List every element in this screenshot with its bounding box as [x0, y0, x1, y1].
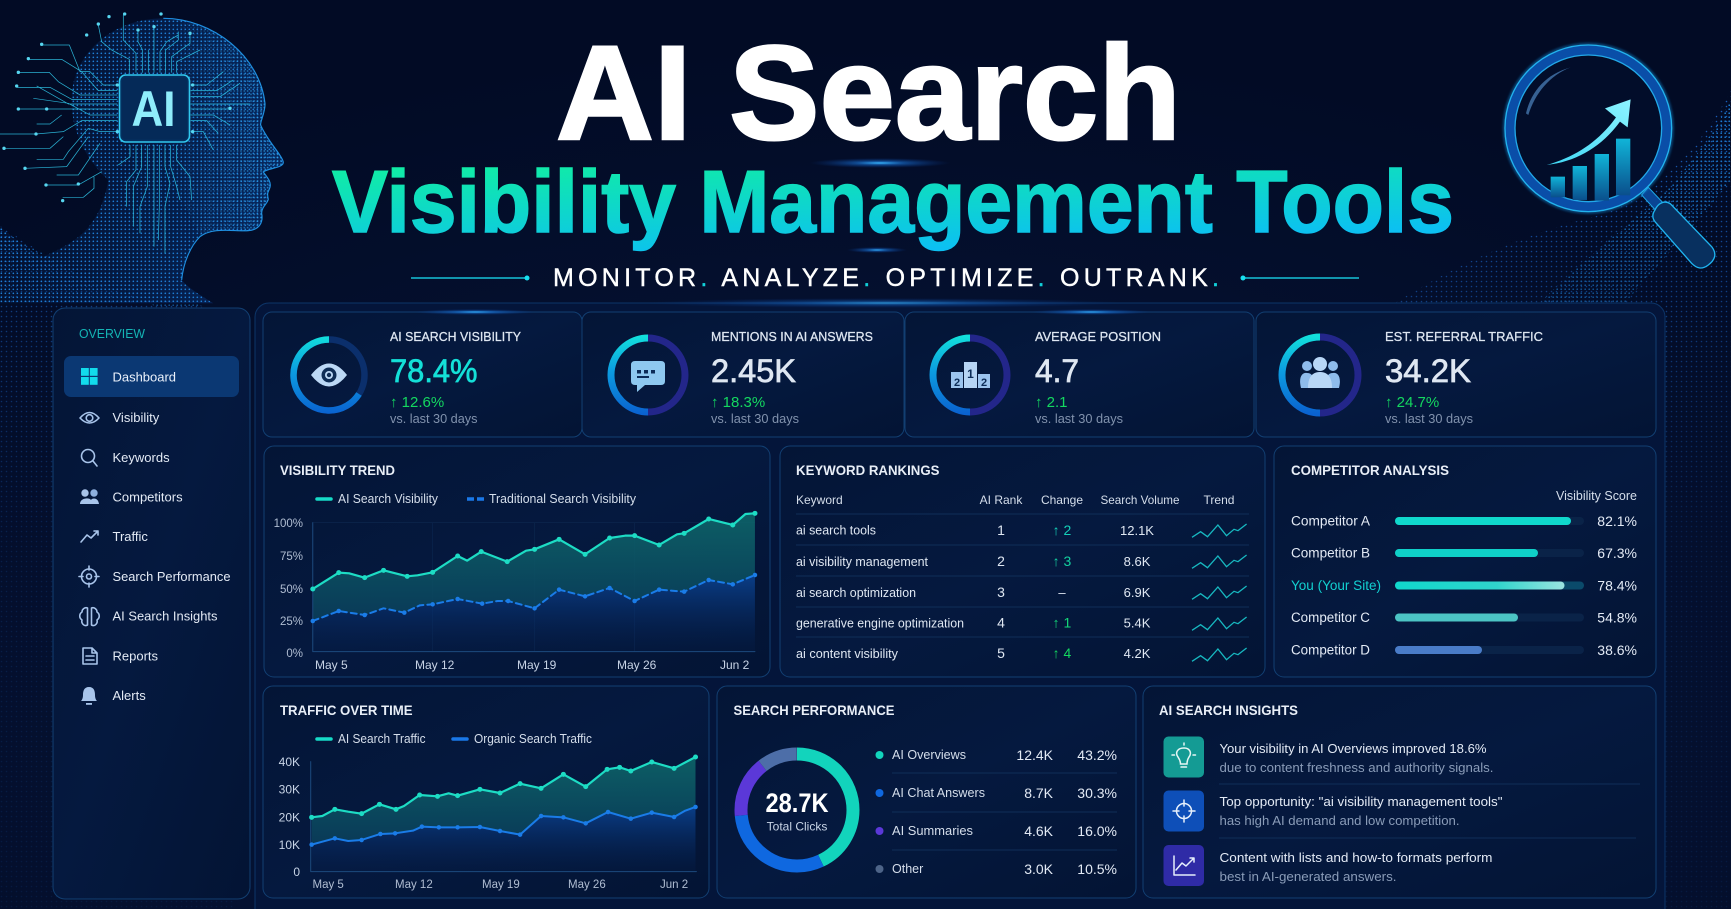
item: Competitors: [80, 489, 183, 504]
y axis labels: 25%: [280, 616, 303, 628]
KPI text: 34.2K: [1385, 353, 1471, 389]
bar: Competitor D: Competitor D: [1291, 642, 1370, 658]
row 5: ↑ 4: [1053, 645, 1072, 661]
legend: Traditional Search Visibility: [489, 492, 637, 506]
column label: Visibility Score: [1556, 489, 1637, 503]
KPI text: vs. last 30 days: [1385, 412, 1473, 426]
active item: Dashboard: [64, 356, 239, 397]
chip: [120, 75, 190, 142]
y axis labels: 100%: [274, 518, 303, 530]
item: Visibility: Visibility: [112, 410, 160, 425]
item: Visibility: [80, 410, 160, 425]
y axis labels: 40K: [279, 755, 300, 769]
insight 2: has high AI demand and low competition.: [1220, 813, 1460, 828]
row 5: 4.2K: [1124, 646, 1151, 661]
KPI text: ↑ 24.7%: [1385, 394, 1439, 411]
bar chart in lens: [1551, 139, 1630, 201]
row 1: ai search tools: [796, 522, 876, 538]
KPI text: [711, 329, 873, 426]
donut chart: [741, 754, 853, 866]
x axis labels: May 26: [568, 879, 606, 891]
KPI card: Mentions in AI Answers: [582, 312, 904, 437]
x axis labels: May 26: [617, 658, 657, 672]
item: Keywords: [82, 450, 170, 466]
panel: AI search insights: [1143, 686, 1656, 898]
heading: COMPETITOR ANALYSIS: [1291, 462, 1449, 478]
icon: podium: 1: [967, 367, 974, 381]
x axis labels: [312, 879, 688, 891]
donut legend: 10.5%: [1077, 861, 1117, 877]
arrow: [1547, 99, 1631, 165]
item: Search Performance: [79, 566, 230, 587]
head silhouette: [0, 18, 283, 303]
legend: [317, 492, 637, 506]
circuit traces: [0, 14, 250, 253]
table header: Search Volume: [1100, 493, 1180, 507]
bar: Competitor A: Competitor A: [1291, 514, 1370, 528]
row 2: [796, 553, 1247, 569]
icon: podium: 2: [981, 377, 987, 389]
icon: people: [1300, 357, 1340, 388]
insight 1: due to content freshness and authority signals.: [1220, 760, 1494, 775]
tagline: MONITOR. ANALYZE. OPTIMIZE. OUTRANK.: [553, 264, 1219, 292]
item: Alerts: Alerts: [112, 688, 146, 703]
insight 2: [1164, 790, 1503, 832]
donut legend: 12.4K: [1016, 747, 1054, 763]
x axis labels: May 19: [517, 658, 557, 672]
bar: Competitor D: [1291, 642, 1637, 658]
insight 2: Top opportunity: "ai visibility management tools": [1220, 794, 1503, 809]
KPI text: 4.7: [1035, 353, 1079, 389]
ring gauge: [611, 338, 685, 412]
insight 3: best in AI-generated answers.: [1220, 869, 1396, 884]
donut chart: 28.7K: [766, 788, 829, 818]
legend: AI Search Visibility: [338, 492, 439, 506]
dotted wave right: [1395, 90, 1731, 909]
icon: podium: [951, 362, 990, 389]
x axis labels: May 12: [395, 879, 433, 891]
row 1: 12.1K: [1120, 523, 1154, 538]
item: AI Search Insights: [80, 608, 218, 626]
item: Competitors: Competitors: [112, 490, 183, 504]
row 5: [796, 645, 1247, 661]
panel: search performance: [717, 686, 1136, 898]
donut legend: 8.7K: [1024, 785, 1054, 801]
KPI text: EST. REFERRAL TRAFFIC: [1385, 329, 1543, 344]
heading: VISIBILITY TREND: [280, 462, 395, 478]
heading: KEYWORD RANKINGS: [796, 462, 940, 478]
legend: [317, 732, 592, 746]
donut legend: 3.0K: [1024, 861, 1054, 877]
dotted wave left: [0, 226, 235, 909]
KPI text: ↑ 18.3%: [711, 394, 765, 411]
insight 1: Your visibility in AI Overviews improved 18.6%: [1220, 741, 1487, 756]
icon: chat bubble: [631, 361, 665, 392]
heading: SEARCH PERFORMANCE: [734, 702, 894, 718]
item: Keywords: Keywords: [112, 450, 170, 465]
donut legend: AI Summaries: [892, 824, 973, 838]
illustration: magnifier with growth chart: [1505, 45, 1715, 268]
item: AI Search Insights: AI Search Insights: [112, 608, 218, 624]
row 4: generative engine optimization: [796, 616, 964, 630]
bar: Competitor A: 82.1%: [1597, 513, 1637, 529]
magnifier handle: [1642, 187, 1715, 268]
item: Reports: [83, 648, 159, 664]
active item: Dashboard: Dashboard: [112, 370, 176, 384]
KPI text: vs. last 30 days: [711, 412, 799, 426]
donut legend: AI Overviews: [892, 748, 966, 762]
ring gauge: [933, 338, 1007, 412]
x axis labels: Jun 2: [720, 658, 750, 672]
row 5: ai content visibility: [796, 646, 898, 661]
item: Alerts: [81, 687, 146, 705]
insight 1: [1164, 736, 1494, 778]
item: Traffic: [81, 529, 148, 544]
line chart: [311, 757, 696, 872]
item: Reports: Reports: [112, 648, 159, 664]
donut legend: Other: [892, 862, 923, 876]
y axis labels: [274, 518, 303, 660]
ring gauge: [1282, 337, 1358, 413]
KPI text: 2.45K: [711, 353, 796, 389]
donut legend: AI Chat Answers: [892, 786, 985, 800]
row 5: 5: [997, 645, 1005, 661]
row 3: 3: [997, 584, 1005, 600]
bar: Competitor B: Competitor B: [1291, 546, 1370, 560]
KPI text: [1385, 329, 1543, 426]
y axis labels: 20K: [279, 810, 300, 824]
bar: Competitor D: 38.6%: [1597, 642, 1637, 658]
table header: Change: [1041, 493, 1083, 507]
bar: You (Your Site): [1291, 578, 1637, 594]
item: Search Performance: Search Performance: [112, 569, 230, 584]
x axis labels: May 5: [315, 658, 348, 672]
row 3: [796, 584, 1247, 600]
row 2: ↑ 3: [1053, 553, 1072, 569]
bar: Competitor A: [1291, 513, 1637, 529]
x axis labels: May 12: [415, 658, 455, 672]
dashboard container: [255, 298, 1665, 909]
panel: sidebar: [53, 308, 250, 899]
table header: AI Rank: [980, 493, 1023, 507]
x axis labels: May 5: [312, 879, 344, 891]
row 1: ↑ 2: [1053, 522, 1072, 538]
heading: AI SEARCH INSIGHTS: [1159, 702, 1298, 718]
row 2: ai visibility management: [796, 554, 928, 569]
row 3: ai search optimization: [796, 585, 916, 600]
sidebar heading: OVERVIEW: [79, 326, 146, 341]
glow accent under title: [810, 158, 950, 168]
icon: eye: [311, 364, 347, 386]
panel: competitor analysis: [1274, 446, 1656, 677]
table header: Trend: [1204, 493, 1234, 507]
icon: podium: 2: [954, 377, 960, 389]
row 4: [796, 614, 1247, 630]
row 1: [796, 522, 1247, 538]
illustration: AI head with circuit chip: [0, 14, 283, 303]
line chart: [313, 513, 755, 652]
KPI text: [390, 329, 521, 426]
chip: AI: [132, 81, 176, 137]
row 1: 1: [997, 522, 1005, 538]
KPI text: vs. last 30 days: [390, 412, 478, 426]
bar: Competitor B: 67.3%: [1597, 545, 1637, 561]
insight 3: [1164, 845, 1492, 886]
KPI text: AVERAGE POSITION: [1035, 329, 1161, 344]
row 4: 4: [997, 614, 1005, 630]
title: AI Search: AI Search: [556, 19, 1181, 168]
y axis labels: 30K: [279, 782, 300, 796]
bar: Competitor C: [1291, 610, 1637, 626]
row 2: 2: [997, 553, 1005, 569]
y axis labels: 75%: [280, 551, 303, 563]
y axis labels: 10K: [279, 838, 300, 852]
bar: You (Your Site): 78.4%: [1597, 578, 1637, 594]
donut legend: [876, 747, 1117, 877]
x axis labels: May 19: [482, 879, 520, 891]
bar: You (Your Site): You (Your Site): [1291, 578, 1381, 593]
KPI card: Est. Referral Traffic: [1256, 312, 1656, 437]
panel: visibility trend: [264, 446, 770, 677]
bar: Competitor C: Competitor C: [1291, 610, 1370, 625]
heading: TRAFFIC OVER TIME: [280, 702, 413, 718]
row 2: 8.6K: [1124, 554, 1151, 569]
legend: AI Search Traffic: [338, 732, 426, 746]
KPI text: MENTIONS IN AI ANSWERS: [711, 329, 873, 344]
panel: traffic over time: [263, 686, 709, 898]
donut legend: 4.6K: [1024, 823, 1054, 839]
KPI text: [1035, 329, 1161, 426]
y axis labels: 50%: [280, 584, 303, 596]
bar: Competitor C: 54.8%: [1597, 610, 1637, 626]
donut legend: 16.0%: [1077, 823, 1117, 839]
title: Visibility Management Tools: Visibility Management Tools: [332, 152, 1454, 251]
donut chart: Total Clicks: [767, 820, 827, 834]
KPI text: AI SEARCH VISIBILITY: [390, 329, 521, 344]
y axis labels: [279, 755, 300, 879]
row 3: –: [1058, 585, 1066, 600]
y axis labels: 0: [293, 865, 300, 879]
y axis labels: 0%: [286, 648, 303, 660]
KPI text: vs. last 30 days: [1035, 412, 1123, 426]
row 3: 6.9K: [1124, 585, 1151, 600]
KPI text: ↑ 12.6%: [390, 394, 444, 411]
KPI text: ↑ 2.1: [1035, 394, 1068, 411]
KPI text: 78.4%: [390, 353, 478, 389]
KPI card: AI Search Visibility: [263, 309, 582, 437]
item: Traffic: Traffic: [112, 529, 148, 544]
table header: Keyword: [796, 493, 843, 507]
bar: Competitor B: [1291, 545, 1637, 561]
insight 3: Content with lists and how-to formats perform: [1220, 850, 1492, 865]
donut legend: 43.2%: [1077, 747, 1117, 763]
row 4: ↑ 1: [1053, 614, 1072, 630]
x axis labels: [315, 658, 750, 672]
ring gauge: [294, 340, 364, 410]
KPI card: Average Position: [905, 309, 1254, 437]
row 4: 5.4K: [1124, 616, 1151, 630]
donut legend: 30.3%: [1077, 785, 1117, 801]
magnifier ring: [1505, 45, 1672, 212]
panel: keyword rankings: [780, 446, 1265, 677]
glow accent under subtitle title: [847, 247, 907, 253]
legend: Organic Search Traffic: [474, 732, 592, 746]
table header: [796, 493, 1234, 507]
x axis labels: Jun 2: [660, 879, 688, 891]
